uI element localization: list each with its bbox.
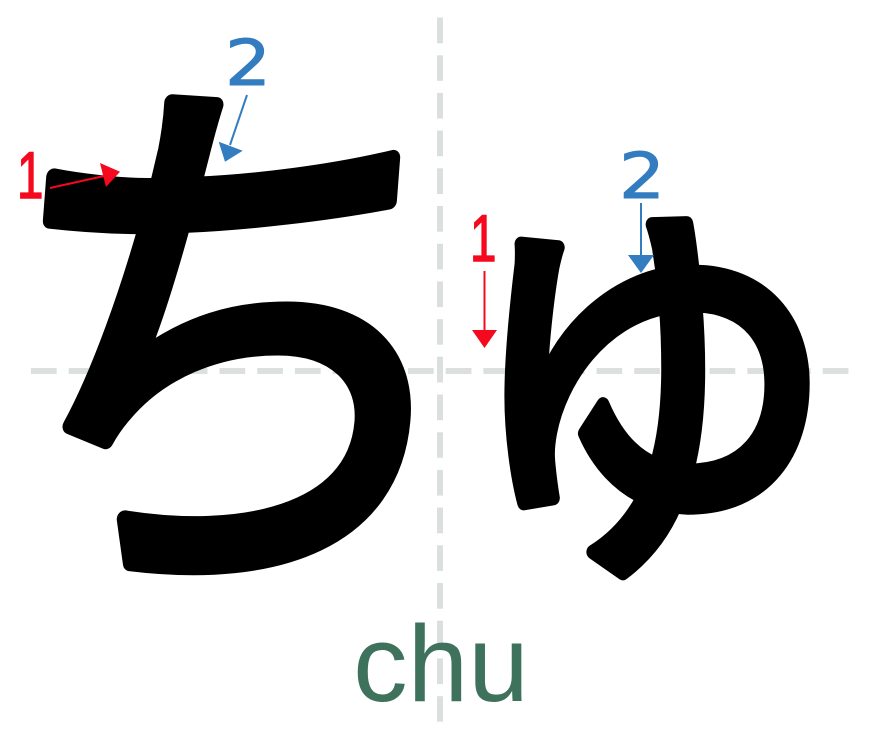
romaji label: chu [353, 603, 529, 725]
stroke order chi 1: number and arrow: 1 [17, 139, 43, 213]
stroke order yu 2: number and arrow: 2 [619, 140, 665, 214]
stroke order yu 2: number and arrow [619, 140, 665, 273]
stroke order chi 2: number and arrow: 2 [225, 27, 271, 101]
stroke order chi 2: number and arrow [219, 27, 271, 162]
kana: small yu: ゅ [424, 79, 867, 638]
stroke order yu 1: number and arrow: 1 [470, 202, 496, 276]
stroke order chi 1: number and arrow [17, 139, 120, 213]
stroke order yu 1: number and arrow [470, 202, 497, 348]
